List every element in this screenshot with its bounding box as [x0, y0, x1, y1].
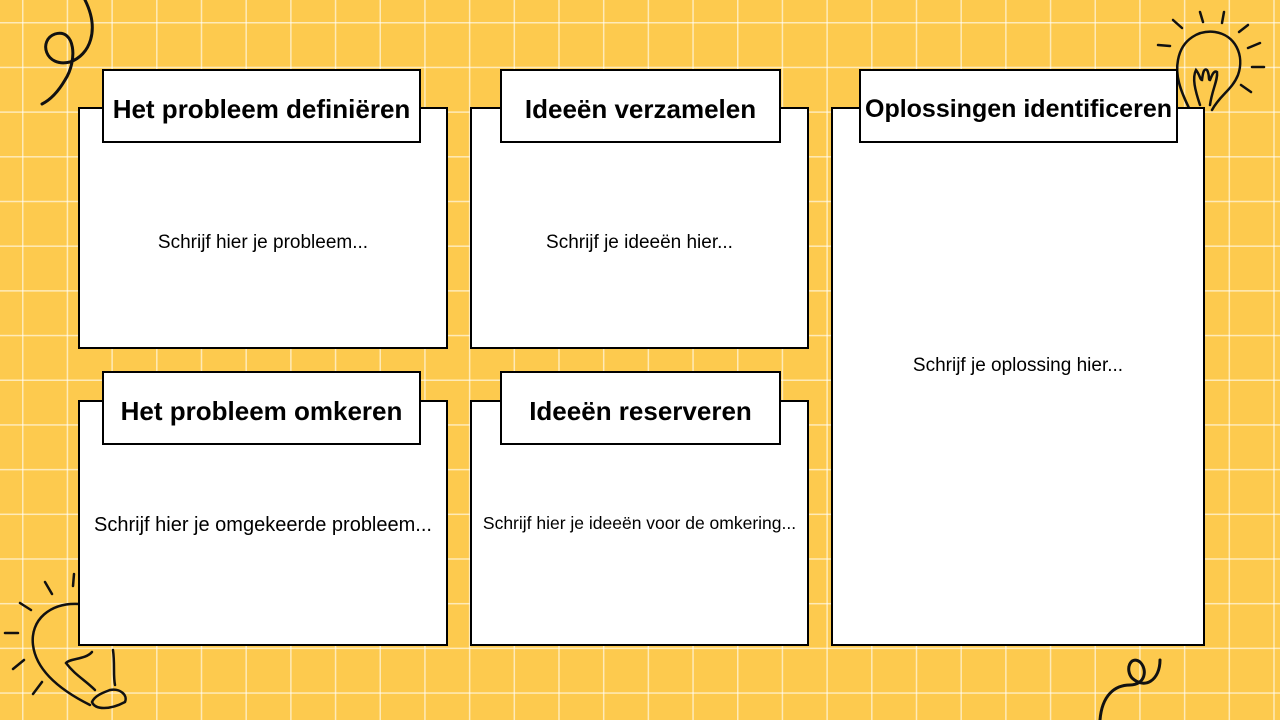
icon: light bulb top right [1156, 10, 1266, 112]
panel: oplossingen [831, 107, 1205, 646]
panel: problem definieren: Schrijf hier je probleem... [158, 232, 368, 253]
panel: probleem omkeren: Schrijf hier je omgekeerde probleem... [94, 514, 432, 536]
heading: Ideeën reserveren: Ideeën reserveren [529, 396, 752, 426]
heading: Het probleem definiëren: Het probleem definiëren [113, 94, 410, 124]
panel: oplossingen: Schrijf je oplossing hier... [913, 354, 1123, 376]
heading: Ideeën verzamelen: Ideeën verzamelen [525, 94, 756, 124]
heading: Het probleem definiëren [102, 69, 421, 143]
panel: probleem omkeren [78, 400, 448, 646]
heading: Oplossingen identificeren: Oplossingen identificeren [865, 95, 1172, 123]
heading: Ideeën verzamelen [500, 69, 781, 143]
panel: ideeen verzamelen: Schrijf je ideeën hier... [546, 232, 733, 253]
panel: ideeen verzamelen [470, 107, 809, 349]
panel: ideeen reserveren: Schrijf hier je ideeën voor de omkering... [483, 512, 796, 532]
decoration: swirl bottom right [1098, 658, 1162, 720]
panel: problem definieren [78, 107, 448, 349]
panel: ideeen reserveren [470, 400, 809, 646]
decoration: swirl top left [40, 0, 94, 106]
icon: light bulb bottom left [4, 572, 127, 710]
heading: Ideeën reserveren [500, 371, 781, 445]
heading: Het probleem omkeren [102, 371, 421, 445]
heading: Oplossingen identificeren [859, 69, 1178, 143]
heading: Het probleem omkeren: Het probleem omkeren [121, 396, 402, 426]
